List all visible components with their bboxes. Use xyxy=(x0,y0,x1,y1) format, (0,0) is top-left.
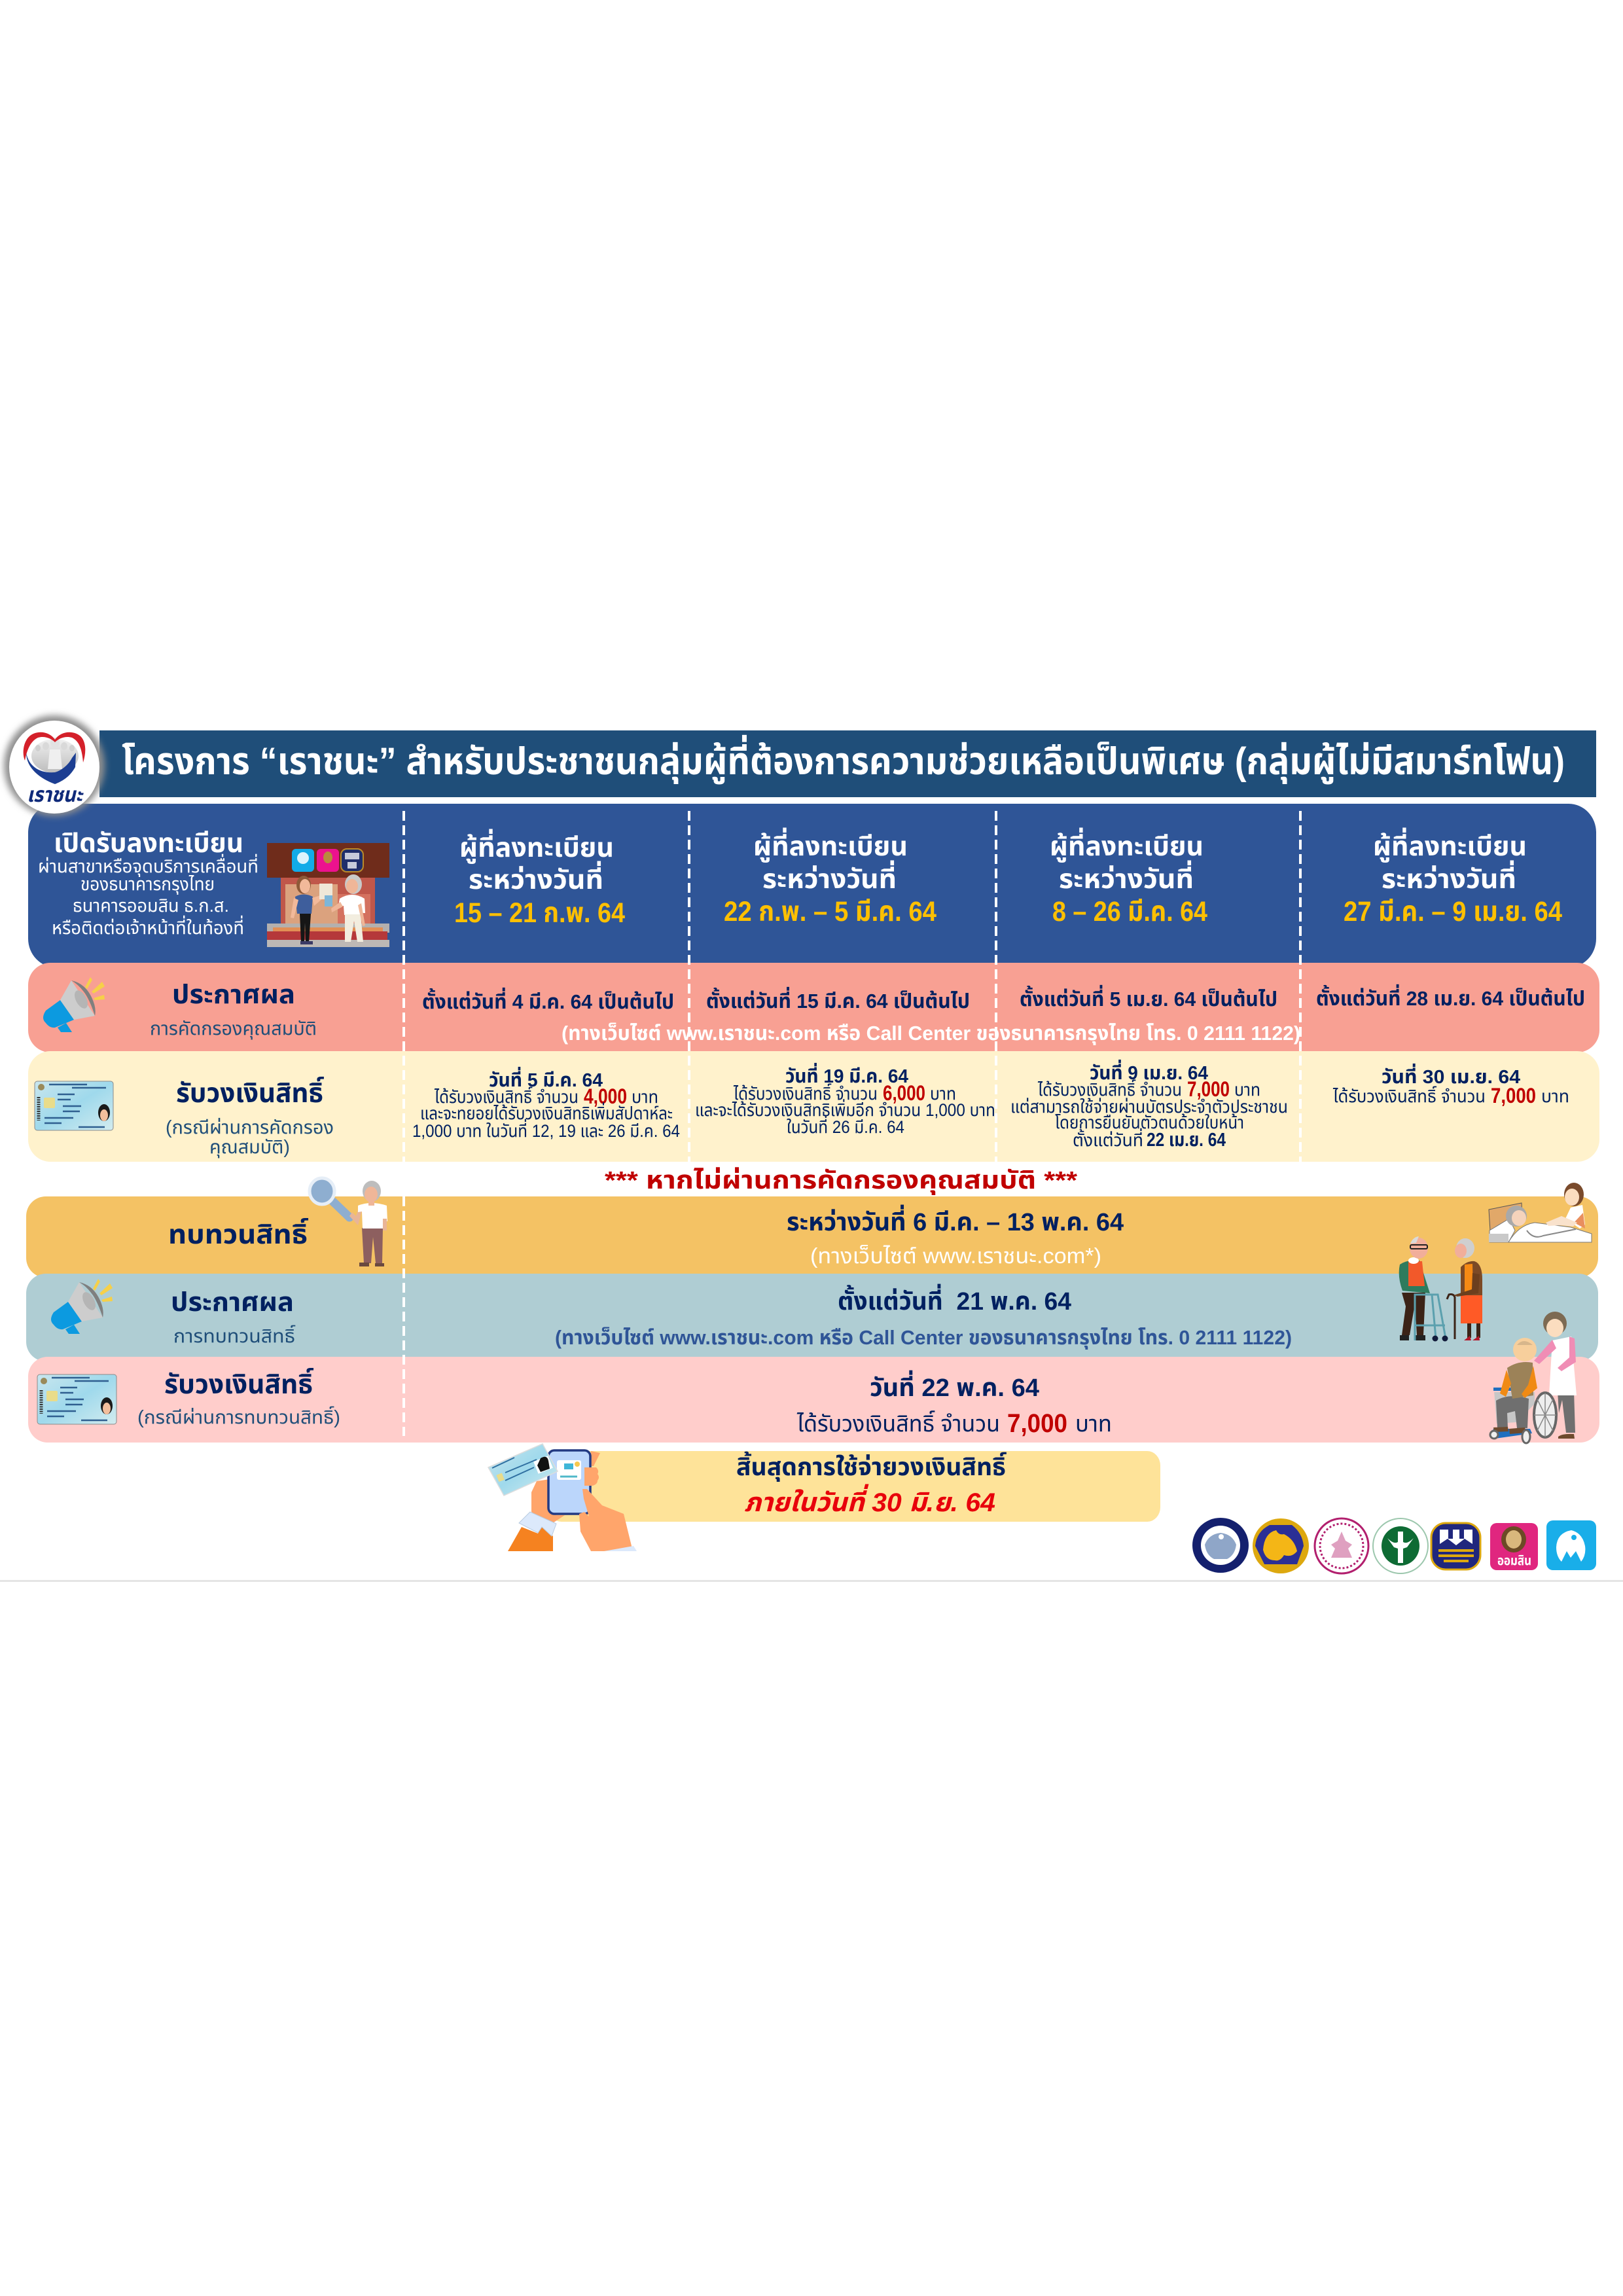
icon: megaphone xyxy=(43,977,105,1032)
benefit sub label: (กรณีผ่านการคัดกรอง xyxy=(166,1117,334,1138)
logo: Krungthai Bank xyxy=(1546,1520,1596,1570)
review label: ทบทวนสิทธิ์ xyxy=(168,1217,309,1249)
icon: ID card xyxy=(35,1081,113,1130)
benefit text: period 2: 6,000 xyxy=(883,1081,925,1105)
announcement label: ประกาศผล xyxy=(172,980,295,1009)
benefit text: period 3: บาท xyxy=(1234,1080,1260,1100)
panel: review result row xyxy=(26,1274,1598,1361)
review channel note: (ทางเว็บไซต์ www.เราชนะ.com*) xyxy=(810,1244,1101,1268)
deadline date: ภายในวันที่ 30 มิ.ย. 64 xyxy=(744,1484,995,1517)
review result date: ตั้งแต่วันที่ 21 พ.ค. 64 xyxy=(838,1283,1071,1316)
review date: ระหว่างวันที่ 6 มี.ค. – 13 พ.ค. 64 xyxy=(787,1204,1124,1236)
column header: period 1: 15 – 21 ก.พ. 64 xyxy=(454,897,625,929)
review benefit amount: บาท xyxy=(1075,1411,1112,1437)
panel: review row xyxy=(26,1196,1598,1278)
warning heading: *** หากไม่ผ่านการคัดกรองคุณสมบัติ *** xyxy=(605,1167,1077,1195)
registration description: ของธนาคารกรุงไทย xyxy=(80,874,215,895)
logo: Ministry of Public Health xyxy=(1373,1518,1428,1573)
column header: period 2: 22 ก.พ. – 5 มี.ค. 64 xyxy=(724,896,936,927)
registration heading: เปิดรับลงทะเบียน xyxy=(54,828,243,858)
logo wordmark: เราชนะ xyxy=(27,783,84,806)
announcement date: period 2: ตั้งแต่วันที่ 15 มี.ค. 64 เป็นต้นไป xyxy=(706,986,970,1013)
benefit text: period 3: แต่สามารถใช้จ่ายผ่านบัตรประจำตัวประชาชน xyxy=(1010,1097,1288,1117)
icon: ID card xyxy=(37,1374,116,1424)
benefit text: period 3: ได้รับวงเงินสิทธิ์ จำนวน xyxy=(1037,1080,1182,1100)
benefit text: period 1: 1,000 บาท ในวันที่ 12, 19 และ 26 มี.ค. 64 xyxy=(412,1119,680,1141)
logo: Government Savings Bank xyxy=(1490,1523,1538,1570)
benefit text: period 4 xyxy=(1332,1063,1569,1107)
column header: period 2 xyxy=(724,827,936,927)
column header: period 1 xyxy=(454,829,625,929)
registration description: ผ่านสาขาหรือจุดบริการเคลื่อนที่ xyxy=(38,853,259,877)
woman xyxy=(296,876,311,894)
registration description: หรือติดต่อเจ้าหน้าที่ในท้องที่ xyxy=(52,915,244,938)
review benefit amount: ได้รับวงเงินสิทธิ์ จำนวน xyxy=(796,1410,1000,1437)
review benefit date: วันที่ 22 พ.ค. 64 xyxy=(870,1370,1039,1402)
column header: period 1: ระหว่างวันที่ xyxy=(469,861,603,895)
review benefit sub label: (กรณีผ่านการทบทวนสิทธิ์) xyxy=(137,1407,340,1428)
logo: BAAC xyxy=(1431,1523,1480,1570)
column header: period 4 xyxy=(1344,827,1562,927)
benefit text: period 3: วันที่ 9 เม.ย. 64 xyxy=(1090,1059,1208,1084)
column header: period 3: 8 – 26 มี.ค. 64 xyxy=(1052,896,1207,927)
review result sub label: การทบทวนสิทธิ์ xyxy=(173,1325,296,1347)
icon: Rao Chana logo badge xyxy=(4,715,105,816)
review benefit label: รับวงเงินสิทธิ์ xyxy=(164,1367,314,1399)
benefit text: period 2: วันที่ 19 มี.ค. 64 xyxy=(785,1062,908,1087)
icon: man with magnifying glass xyxy=(310,1178,387,1266)
benefit text: period 4: ได้รับวงเงินสิทธิ์ จำนวน xyxy=(1332,1086,1486,1106)
column header: period 4: 27 มี.ค. – 9 เม.ย. 64 xyxy=(1344,896,1562,927)
benefit text: period 3: ตั้งแต่วันที่ xyxy=(1073,1128,1143,1150)
announcement date: period 1: ตั้งแต่วันที่ 4 มี.ค. 64 เป็นต้นไป xyxy=(422,987,674,1013)
benefit text: period 1: และจะทยอยได้รับวงเงินสิทธิเพิ่มสัปดาห์ละ xyxy=(420,1102,673,1123)
icon: bank counter illustration xyxy=(267,843,389,947)
icon: megaphone xyxy=(51,1279,113,1334)
benefit text: period 4: วันที่ 30 เม.ย. 64 xyxy=(1382,1063,1520,1088)
man xyxy=(345,874,362,894)
panel: benefit row xyxy=(28,1051,1599,1162)
title bar xyxy=(99,730,1596,797)
review result channel note: (ทางเว็บไซต์ www.เราชนะ.com หรือ Call Center ของธนาคารกรุงไทย โทร. 0 2111 1122) xyxy=(555,1326,1292,1350)
partner logos xyxy=(1192,1518,1596,1573)
icon: nurse and bedridden patient xyxy=(1489,1183,1592,1242)
icon: elderly couple with walker and cane xyxy=(1399,1236,1482,1342)
column header: period 1: ผู้ที่ลงทะเบียน xyxy=(459,829,614,864)
logo: Government Savings Bank: ออมสิน xyxy=(1497,1554,1531,1568)
panel: announcement row xyxy=(28,963,1599,1052)
column dividers xyxy=(404,811,1300,1436)
benefit text: period 3 xyxy=(1010,1059,1288,1151)
announcement date: period 3: ตั้งแต่วันที่ 5 เม.ย. 64 เป็นต้นไป xyxy=(1020,984,1277,1011)
registration description: ธนาคารออมสิน ธ.ก.ส. xyxy=(73,895,229,916)
benefit label: รับวงเงินสิทธิ์ xyxy=(176,1076,325,1108)
benefit text: period 3: 7,000 xyxy=(1187,1077,1230,1101)
panel: review benefit row xyxy=(28,1357,1599,1443)
review benefit amount: 7,000 xyxy=(1007,1409,1067,1438)
announcement date: period 4: ตั้งแต่วันที่ 28 เม.ย. 64 เป็นต้นไป xyxy=(1316,984,1585,1010)
panel: registration row xyxy=(28,804,1596,967)
logo: provincial seal xyxy=(1315,1518,1368,1573)
deadline text: สิ้นสุดการใช้จ่ายวงเงินสิทธิ์ xyxy=(736,1451,1007,1482)
benefit text: period 2: และจะได้รับวงเงินสิทธิเพิ่มอีก จำนวน 1,000 บาท xyxy=(695,1099,995,1120)
benefit text: period 4: บาท xyxy=(1541,1086,1569,1106)
column header: period 2: ระหว่างวันที่ xyxy=(762,860,897,894)
benefit text: period 1 xyxy=(412,1066,680,1141)
benefit text: period 1: 4,000 xyxy=(584,1085,627,1108)
registration description xyxy=(38,853,259,938)
benefit text: period 4: 7,000 xyxy=(1491,1084,1536,1107)
column header: period 4: ระหว่างวันที่ xyxy=(1382,860,1516,894)
footer line xyxy=(0,1580,1623,1582)
icon: nurse pushing wheelchair xyxy=(1490,1312,1577,1443)
benefit text: period 2: บาท xyxy=(930,1084,956,1103)
benefit text: period 2: ได้รับวงเงินสิทธิ์ จำนวน xyxy=(733,1084,878,1103)
column header: period 4: ผู้ที่ลงทะเบียน xyxy=(1373,827,1527,863)
column header: period 3: ระหว่างวันที่ xyxy=(1059,860,1194,894)
benefit text: period 1: ได้รับวงเงินสิทธิ์ จำนวน xyxy=(434,1087,579,1107)
column header: period 3 xyxy=(1050,827,1207,927)
benefit text: period 2 xyxy=(695,1062,995,1137)
benefit text: period 3: 22 เม.ย. 64 xyxy=(1147,1130,1226,1151)
announcement sub label: การคัดกรองคุณสมบัติ xyxy=(150,1018,317,1039)
benefit text: period 3: โดยการยืนยันตัวตนด้วยใบหน้า xyxy=(1055,1113,1244,1132)
announcement channel note: (ทางเว็บไซต์ www.เราชนะ.com หรือ Call Center ของธนาคารกรุงไทย โทร. 0 2111 1122) xyxy=(562,1022,1300,1045)
icon: hands holding phone and ID card xyxy=(488,1444,637,1551)
logo: Ministry of Finance xyxy=(1192,1518,1249,1573)
logo: Ministry of Interior xyxy=(1253,1518,1309,1573)
column header: period 2: ผู้ที่ลงทะเบียน xyxy=(753,827,908,863)
review benefit amount xyxy=(796,1409,1112,1438)
benefit text: period 2: ในวันที่ 26 มี.ค. 64 xyxy=(787,1115,904,1137)
column header: period 3: ผู้ที่ลงทะเบียน xyxy=(1050,827,1204,863)
benefit text: period 1: วันที่ 5 มี.ค. 64 xyxy=(489,1066,603,1091)
benefit sub label: คุณสมบัติ) xyxy=(209,1137,290,1158)
review result label: ประกาศผล xyxy=(171,1288,294,1317)
benefit text: period 1: บาท xyxy=(632,1087,658,1107)
panel: spending deadline xyxy=(548,1451,1160,1522)
benefit sub label xyxy=(166,1117,334,1158)
